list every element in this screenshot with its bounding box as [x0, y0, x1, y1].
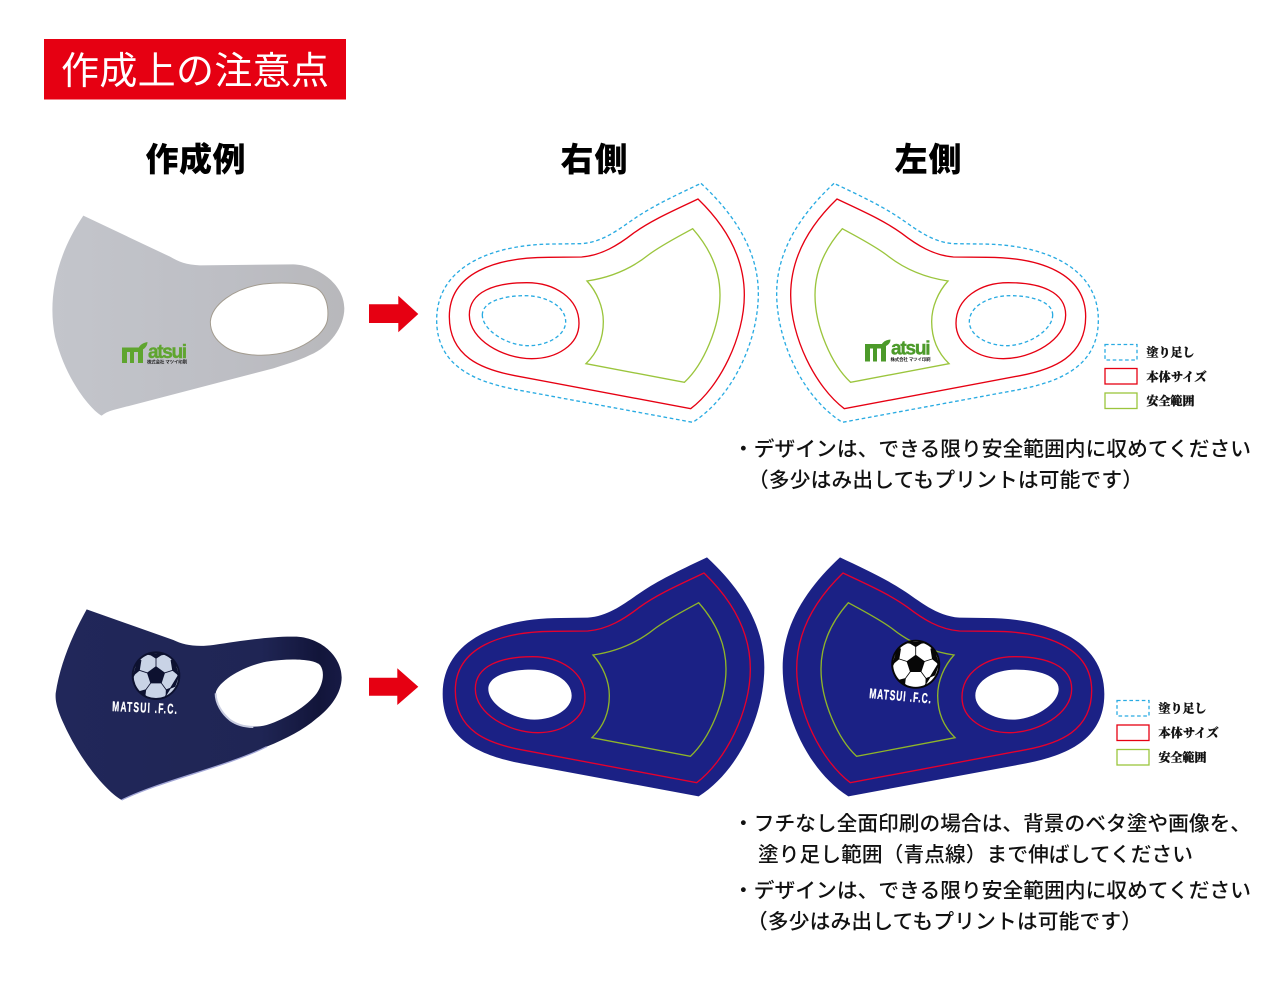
logo: matsui on template	[865, 338, 931, 363]
title banner	[44, 39, 346, 100]
photo: grey mask with logo	[52, 216, 344, 416]
text: team name on mask: MATSUI .F.C.	[112, 700, 177, 717]
title banner: 作成上の注意点	[61, 51, 329, 93]
arrow: bottom row	[369, 668, 418, 705]
template: right side filled	[443, 557, 764, 796]
note: bottom row: ・デザインは、できる限り安全範囲内に収めてください	[733, 878, 1251, 902]
template: left side filled with football	[783, 557, 1104, 796]
photo: navy mask with football	[56, 609, 342, 800]
logo: matsui on mask: atsui	[148, 342, 187, 363]
heading: 作成例: 作成例	[146, 141, 246, 178]
legend: bottom row: 本体サイズ	[1158, 725, 1218, 740]
legend: top row: 本体サイズ	[1146, 369, 1206, 384]
legend: bottom row: 塗り足し	[1158, 700, 1206, 716]
logo: matsui on mask: 株式会社 マツイ印刷	[147, 358, 188, 365]
legend: bottom row: 安全範囲	[1158, 750, 1206, 764]
legend: top row: 塗り足し	[1146, 344, 1194, 360]
legend: bottom row	[1117, 700, 1218, 765]
icon: football on template	[891, 640, 940, 689]
note: top row	[733, 437, 1251, 492]
arrow: top row	[369, 296, 418, 332]
note: bottom row	[733, 812, 1251, 934]
legend: top row	[1105, 344, 1206, 408]
note: bottom row: ・フチなし全面印刷の場合は、背景のベタ塗や画像を、	[733, 812, 1251, 836]
template: right side outline	[437, 183, 758, 422]
logo: matsui on mask	[122, 342, 188, 365]
note: top row: （多少はみ出してもプリントは可能です）	[748, 469, 1143, 492]
note: bottom row: （多少はみ出してもプリントは可能です）	[747, 910, 1142, 934]
logo: matsui on template: atsui	[891, 338, 930, 360]
logo: matsui on template: 株式会社 マツイ印刷	[890, 356, 931, 363]
note: bottom row: 塗り足し範囲（青点線）まで伸ばしてください	[758, 844, 1193, 866]
icon: football on mask	[132, 651, 180, 700]
heading: 左側: 左側	[894, 141, 962, 178]
text: team name on template: MATSUI .F.C.	[869, 687, 932, 707]
template: left side outline with logo	[777, 183, 1098, 422]
heading: 右側: 右側	[560, 141, 628, 178]
legend: top row: 安全範囲	[1146, 393, 1194, 408]
note: top row: ・デザインは、できる限り安全範囲内に収めてください	[733, 437, 1251, 461]
